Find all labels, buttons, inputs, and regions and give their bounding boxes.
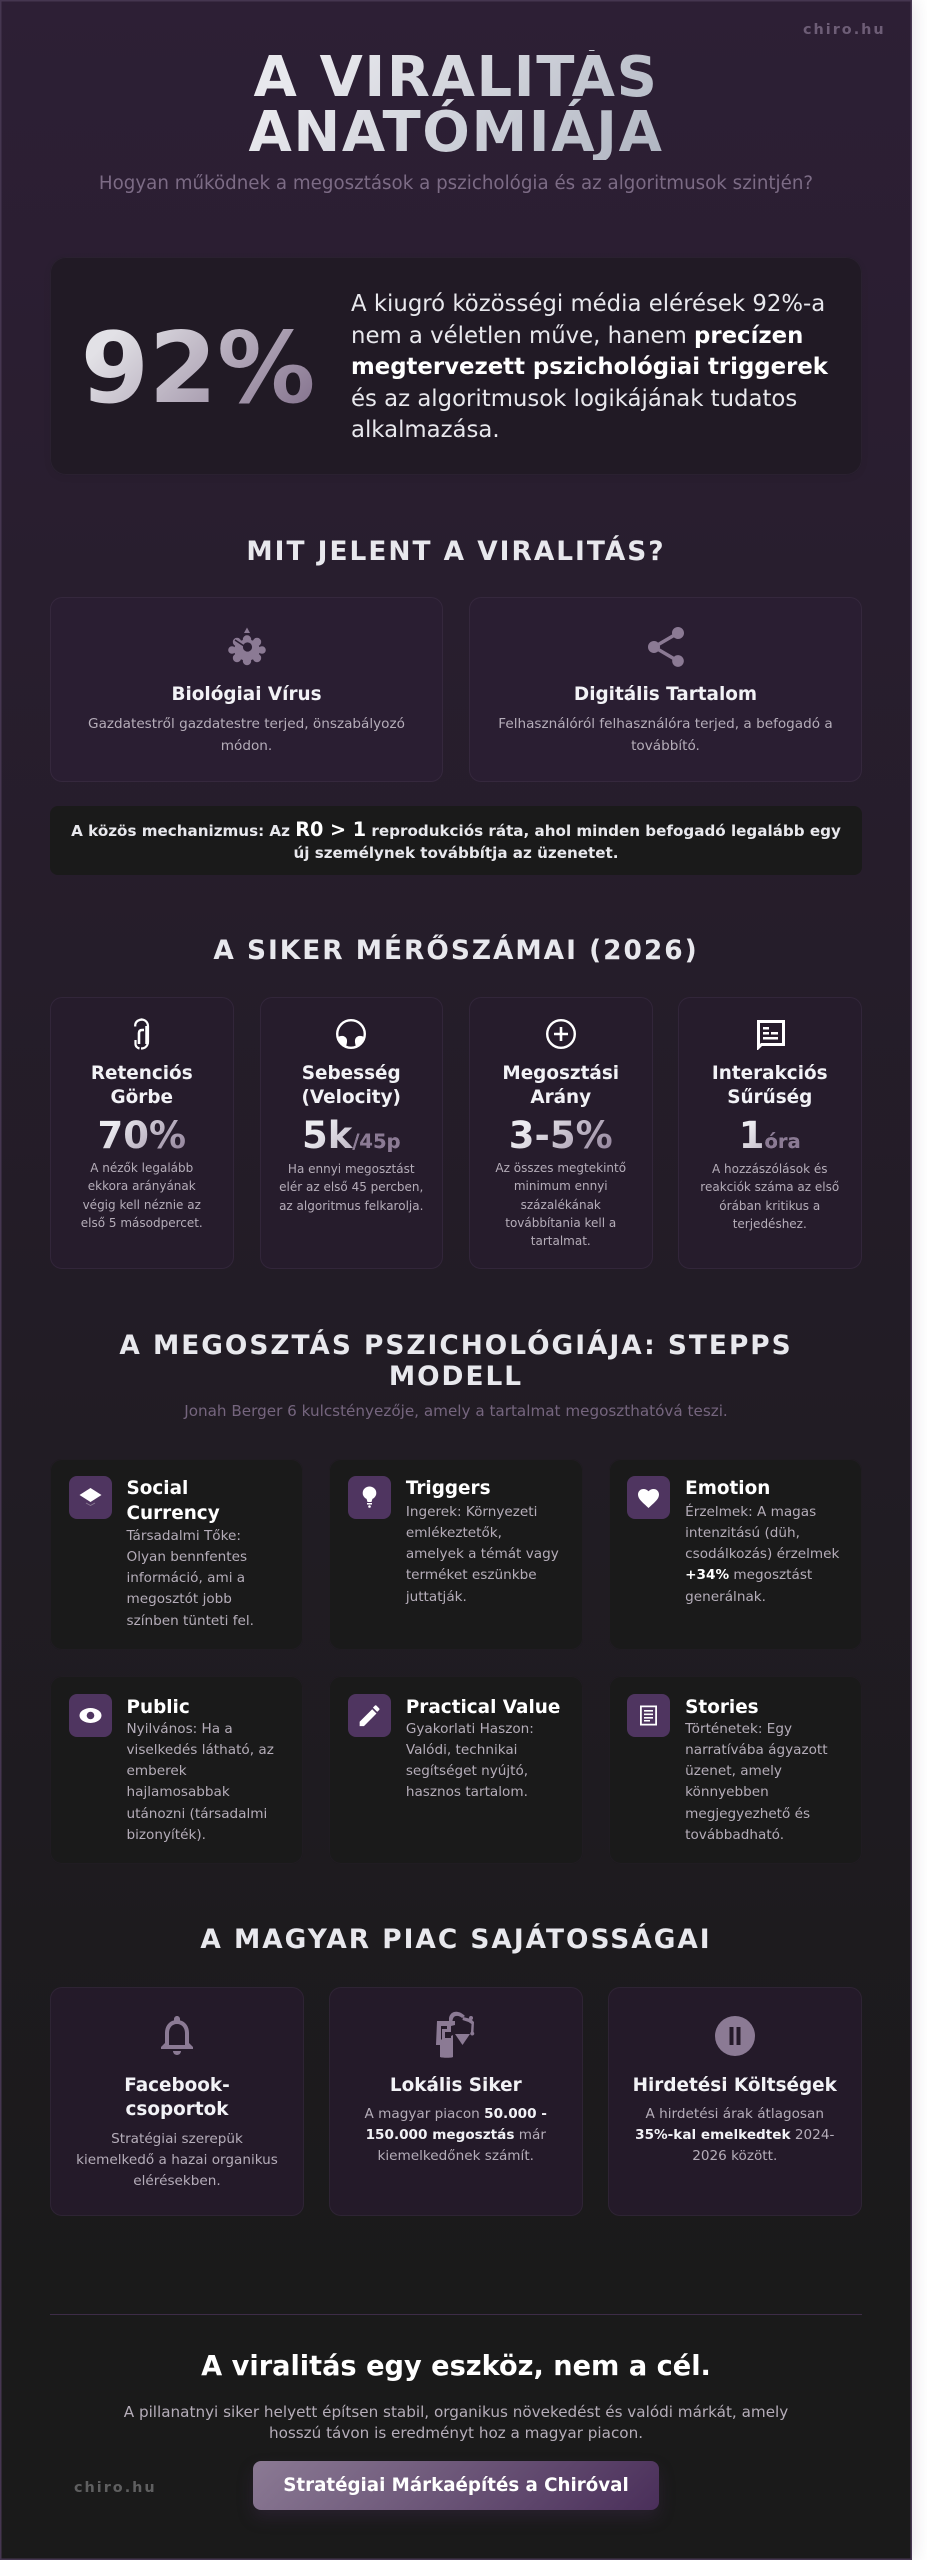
card title: Biológiai Vírus [171,684,322,705]
description: megjegyezhető és [685,1806,810,1822]
description: információ, ami a [126,1570,245,1586]
closing heading: A viralitás egy eszköz, nem a cél. [201,2351,711,2382]
heading: mit jelent a viralitás: MIT JELENT A VIRALITÁS? [246,536,666,567]
panel: facebook-csoportok [50,1987,304,2216]
description: emberek [126,1763,187,1779]
metric description: A nézők legalább [90,1161,193,1175]
metric description: ekkora arányának [88,1179,196,1193]
callout text: új személynek továbbítja az üzenetet. [293,844,619,862]
title: ANATÓMIÁJA [248,100,664,165]
brand mark: bottom: chiro.hu [74,2480,157,2496]
card description: 35%-kal emelkedtek 2024- [635,2127,834,2143]
metric value: 5k/45p [302,1114,401,1157]
description: csodálkozás) érzelmek [685,1546,839,1562]
card title [124,2074,230,2120]
metric value: 70% [97,1114,186,1157]
metric value: 3-5% [509,1114,613,1157]
metric description: tartalmat. [531,1234,591,1248]
card description [364,2106,547,2164]
hero text: alkalmazása. [351,417,500,443]
title: Triggers [406,1478,491,1499]
card description: 150.000 megosztás már [366,2127,546,2143]
brand mark: top: chiro.hu [803,22,886,38]
description: utánozni (társadalmi [126,1806,267,1822]
metric description: elér az első 45 percben, [279,1180,423,1194]
description: bizonyíték). [126,1827,206,1843]
description: színben tünteti fel. [126,1613,254,1629]
description: továbbadható. [685,1827,784,1843]
description: juttatják. [406,1589,467,1605]
card description: módon. [221,738,272,754]
panel: interakciós sűrűség [678,997,862,1269]
icon: bell [161,2016,193,2055]
title: Public [126,1697,190,1718]
icon: comment [757,1020,785,1050]
description: narratívába ágyazott [685,1742,828,1758]
metric description [81,1161,203,1230]
panel: digitális tartalom [469,597,862,782]
panel: sebesség [260,997,443,1269]
panel: lokális siker [329,1987,582,2216]
description: Társadalmi Tőke: [126,1528,241,1544]
description: hajlamosabbak [126,1784,230,1800]
metric description: Az összes megtekintő [495,1161,626,1175]
icon: bulb [348,1476,391,1519]
description: Valódi, technikai [406,1742,517,1758]
card description [635,2106,834,2164]
icon: add circle [546,1019,576,1049]
metric description: százalékának [521,1198,601,1212]
metric description: az algoritmus felkarolja. [279,1199,423,1213]
heading: stepps: MODELL [389,1360,523,1392]
metric description: órában kritikus a [719,1199,820,1213]
metric title: Megosztási [502,1062,619,1084]
metric description [495,1161,626,1248]
description: emlékeztetők, [406,1525,502,1541]
cta button [253,2461,659,2510]
hero number: 92% [81,312,315,426]
metric title [502,1062,619,1108]
icon: share [648,627,684,667]
hero text [351,291,828,443]
metric description: A hozzászólások és [712,1162,828,1176]
card description: kiemelkedőnek számít. [378,2148,534,2164]
hero text: nem a véletlen műve, hanem precízen [351,322,803,348]
description: Nyilvános: Ha a [126,1721,233,1737]
heading: siker mérőszámai: A SIKER MÉRŐSZÁMAI (2026) [213,935,699,966]
panel: practical value [329,1676,583,1864]
heading: magyar piac: A MAGYAR PIAC SAJÁTOSSÁGAI [200,1924,712,1955]
card description [88,716,405,754]
description: +34% megosztást [685,1567,812,1583]
icon: retention [134,1018,150,1050]
card description: Felhasználóról felhasználóra terjed, a befogadó a [498,716,833,732]
panel: public [50,1676,303,1864]
description [126,1721,274,1843]
panel: social currency [50,1459,303,1650]
description: Gyakorlati Haszon: [406,1721,534,1737]
card description: Gazdatestről gazdatestre terjed, önszabályozó [88,716,405,732]
icon: diamond [68,1476,112,1519]
card description: továbbító. [631,738,700,754]
card title: Hirdetési Költségek [633,2074,837,2096]
metric title: Interakciós [712,1062,828,1084]
panel: hirdetési költségek [608,1987,862,2216]
card description: A magyar piacon 50.000 - [365,2106,547,2122]
icon: virus [228,628,266,666]
hero text: megtervezett pszichológiai triggerek [351,354,828,380]
metric description: Ha ennyi megosztást [288,1162,415,1176]
cta button: Stratégiai Márkaépítés a Chiróval [283,2475,629,2496]
icon: article [627,1694,670,1737]
subtitle: Hogyan működnek a megosztások a pszichológia és az algoritmusok szintjén? [99,173,813,194]
title: A VIRALITÁS [253,45,659,110]
metric description: továbbítania kell a [505,1216,616,1230]
callout: R0 mechanism [50,806,862,875]
metric title [91,1062,193,1108]
metric description [700,1162,839,1231]
metric title: Sűrűség [727,1087,812,1108]
card description: Stratégiai szerepük [111,2130,243,2146]
title: Currency [126,1502,220,1524]
icon: pause [715,2016,755,2056]
description: Érzelmek: A magas [685,1504,816,1520]
card title: Facebook- [124,2074,230,2096]
metric description: végig kell néznie az [83,1198,201,1212]
description: generálnak. [685,1589,766,1605]
card title: csoportok [125,2098,228,2120]
metric title: Sebesség [302,1062,401,1084]
panel: triggers [329,1459,583,1650]
description: terméket eszünkbe [406,1567,537,1583]
description: könnyebben [685,1784,769,1800]
panel: stories [609,1676,862,1864]
description: viselkedés látható, az [126,1742,274,1758]
card description [76,2130,278,2188]
metric title: (Velocity) [302,1087,401,1108]
card description: elérésekben. [133,2172,221,2188]
metric description [279,1162,423,1213]
closing text: A pillanatnyi siker helyett építsen stabil, organikus növekedést és valódi márkát, amely [124,2402,788,2420]
card description: A hirdetési árak átlagosan [646,2106,824,2122]
metric title: Arány [530,1087,591,1108]
callout text: A közös mechanizmus: Az R0 > 1 reprodukciós ráta, ahol minden befogadó legalább egy [71,818,841,841]
description: segítséget nyújtó, [406,1763,528,1779]
metric value: 1óra [739,1114,801,1157]
icon: heart [627,1476,670,1519]
metric description: terjedéshez. [733,1217,807,1231]
metric description: minimum ennyi [514,1179,608,1193]
metric description: reakciók száma az első [700,1180,839,1194]
description: Történetek: Egy [685,1721,792,1737]
metric title: Görbe [111,1087,173,1108]
card description: 2026 között. [692,2148,777,2164]
title: Emotion [685,1478,770,1499]
description [685,1721,828,1843]
heading: stepps [119,1329,793,1392]
description: Ingerek: Környezeti [406,1504,537,1520]
card description: kiemelkedő a hazai organikus [76,2152,278,2168]
description: amelyek a témát vagy [406,1546,559,1562]
card title: Lokális Siker [390,2074,522,2096]
metric title: Retenciós [91,1062,193,1084]
description [126,1528,254,1629]
description: intenzitású (düh, [685,1525,800,1541]
closing text [124,2402,788,2442]
description: megosztót jobb [126,1591,232,1607]
icon: eye [68,1694,112,1737]
panel: emotion [609,1459,862,1650]
icon: speed [336,1019,366,1049]
panel: hero statistic [50,257,862,475]
title: Practical Value [406,1697,560,1718]
metric description: első 5 másodpercet. [81,1216,203,1230]
icon: pencil [348,1694,391,1737]
card title: Digitális Tartalom [574,684,757,705]
title [126,1478,220,1524]
description: Olyan bennfentes [126,1549,247,1565]
description [685,1504,840,1605]
title: Stories [685,1697,759,1718]
title: Social [126,1478,188,1499]
description [406,1504,559,1605]
heading: stepps: A MEGOSZTÁS PSZICHOLÓGIÁJA: STEPPS [119,1330,793,1360]
panel: biológiai vírus [50,597,443,782]
callout text [71,818,841,862]
metric title [302,1062,401,1108]
closing text: hosszú távon is eredményt hoz a magyar piacon. [269,2424,643,2442]
icon: local success [436,2012,474,2058]
hero text: A kiugró közösségi média elérések 92%-a [351,291,825,317]
panel: megosztási arány [469,997,652,1269]
title [206,50,706,160]
description [406,1721,534,1800]
hero text: és az algoritmusok logikájának tudatos [351,386,797,412]
description: üzenet, amely [685,1763,782,1779]
description: hasznos tartalom. [406,1784,528,1800]
panel: retenciós görbe [50,997,234,1269]
card description [498,716,833,754]
subheading: stepps: Jonah Berger 6 kulcstényezője, amely a tartalmat megoszthatóvá teszi. [184,1402,728,1420]
metric title [712,1062,828,1108]
